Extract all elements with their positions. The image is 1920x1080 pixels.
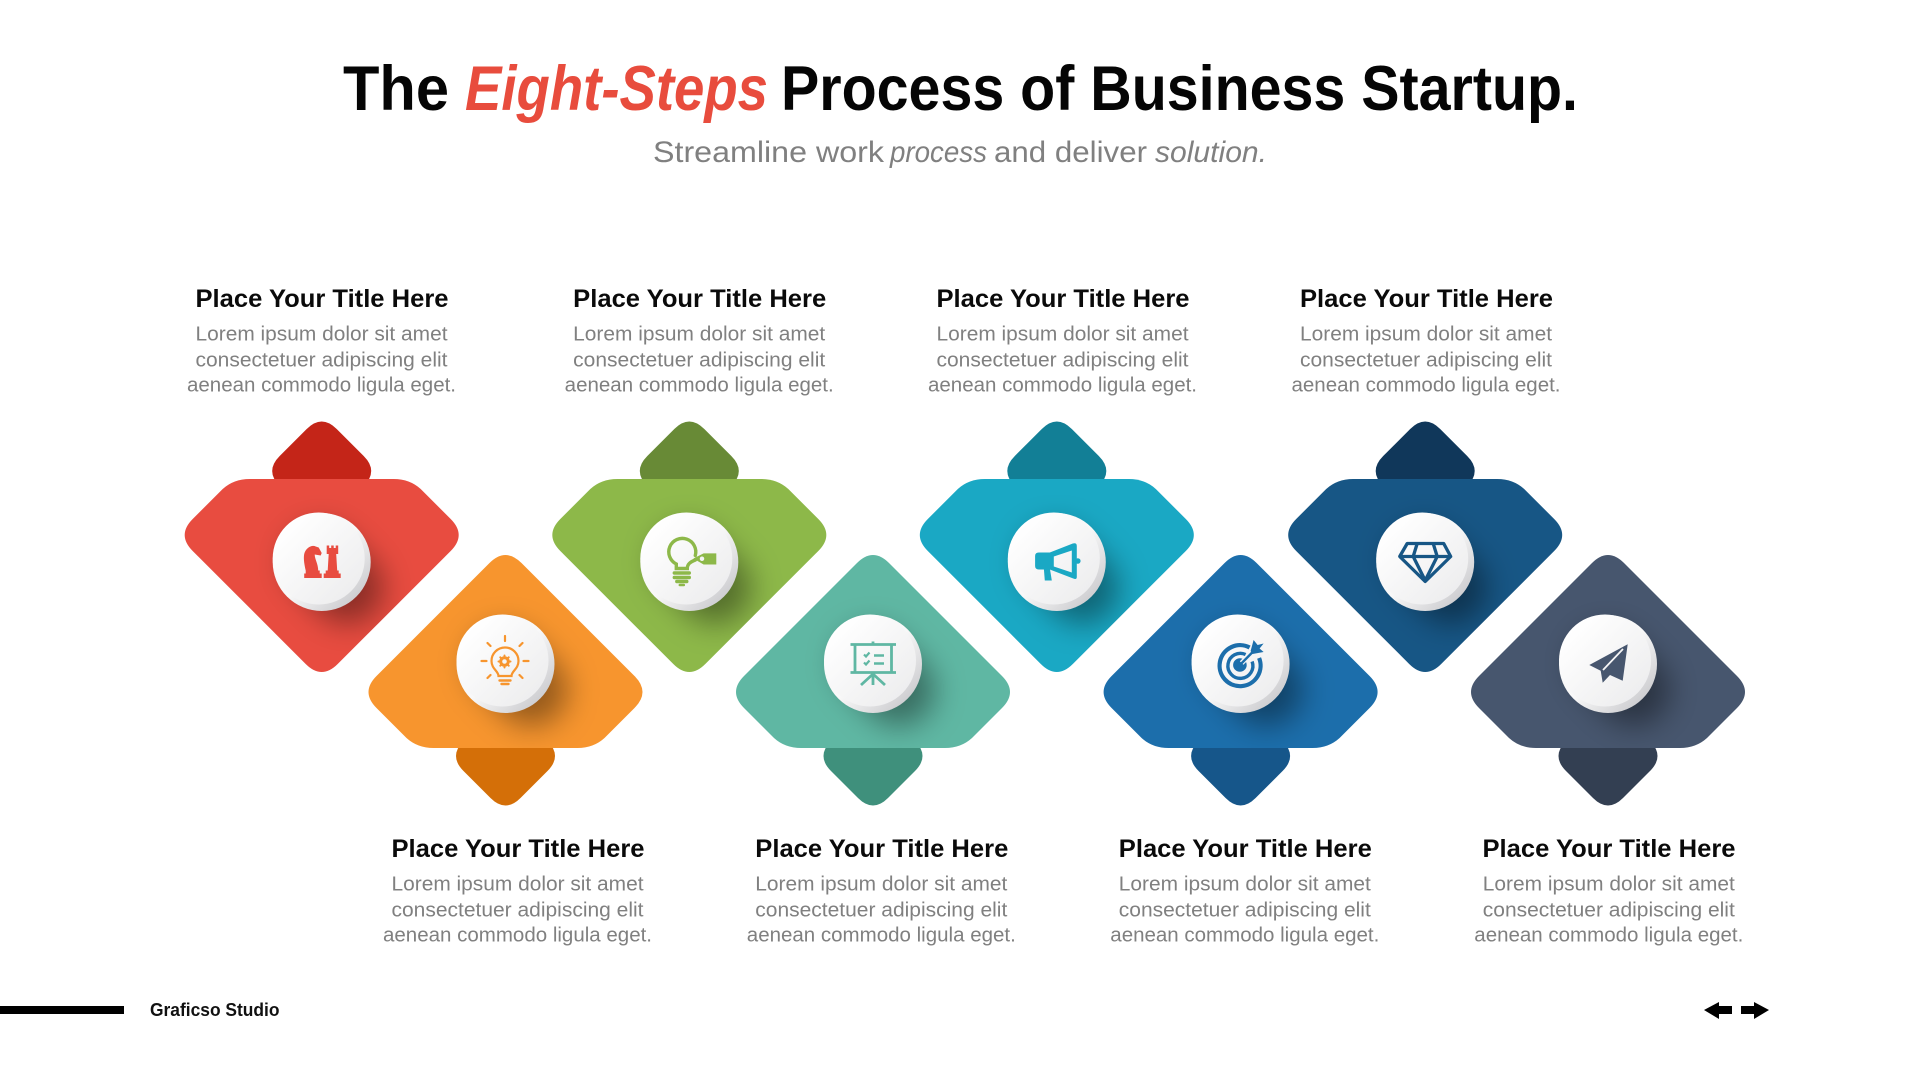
badge with gem icon xyxy=(1376,512,1474,611)
text block: step 6: consectetuer adipiscing elit xyxy=(1119,900,1371,922)
subtitle xyxy=(653,136,1267,169)
step 1: red diamond xyxy=(185,422,459,672)
title: The xyxy=(343,54,449,124)
badge with bulb icon xyxy=(456,614,554,713)
text block: step 6: Place Your Title Here xyxy=(1119,835,1372,863)
icon: paper plane xyxy=(1589,644,1628,683)
icon: megaphone xyxy=(1035,543,1081,580)
text block: step 7: Lorem ipsum dolor sit amet xyxy=(1300,324,1552,346)
text block: step 3: consectetuer adipiscing elit xyxy=(573,350,826,372)
badge with bulb tag icon xyxy=(640,512,738,611)
tab xyxy=(1376,422,1475,528)
text block: step 3: Place Your Title Here xyxy=(573,285,826,313)
text block: step 4: Lorem ipsum dolor sit amet xyxy=(755,874,1008,896)
diamond body xyxy=(185,479,459,672)
tab xyxy=(640,422,739,528)
title xyxy=(343,54,1578,124)
diamond body xyxy=(1471,555,1745,748)
badge with paper plane icon xyxy=(1559,614,1657,713)
icon: presentation board xyxy=(850,642,896,685)
step 4: teal diamond xyxy=(736,555,1010,806)
step 7: navy diamond xyxy=(1288,422,1562,672)
footer label: Graficso Studio xyxy=(150,999,280,1020)
step 8: slate diamond xyxy=(1471,555,1745,806)
title: Eight-Steps xyxy=(465,54,768,124)
text block: step 4: Place Your Title Here xyxy=(755,835,1008,863)
tab xyxy=(272,422,371,528)
text block: step 2 xyxy=(383,835,652,946)
text block: step 6: Lorem ipsum dolor sit amet xyxy=(1119,874,1371,896)
text block: step 8: Lorem ipsum dolor sit amet xyxy=(1483,874,1735,896)
text block: step 5: consectetuer adipiscing elit xyxy=(936,350,1189,372)
text block: step 1: consectetuer adipiscing elit xyxy=(196,350,448,372)
tab xyxy=(1007,422,1106,528)
text block: step 4 xyxy=(747,835,1016,946)
diamond body xyxy=(736,555,1010,748)
badge with megaphone icon xyxy=(1008,512,1106,611)
tab xyxy=(1191,699,1290,806)
text block: step 2: aenean commodo ligula eget. xyxy=(383,924,652,946)
step 6: blue diamond xyxy=(1104,555,1378,806)
diamond body xyxy=(920,479,1194,672)
diamond body xyxy=(1104,555,1378,748)
navigation arrows xyxy=(1704,1002,1769,1019)
icon: diamond gem xyxy=(1400,544,1451,582)
subtitle: solution. xyxy=(1155,136,1267,169)
text block: step 8: Place Your Title Here xyxy=(1482,835,1736,863)
badge with presentation icon xyxy=(824,614,922,713)
text block: step 5: Lorem ipsum dolor sit amet xyxy=(936,324,1189,346)
text block: step 2: Place Your Title Here xyxy=(392,835,645,863)
icon: right arrow xyxy=(1741,1002,1769,1019)
text block: step 6: aenean commodo ligula eget. xyxy=(1110,924,1379,946)
footer bar xyxy=(0,1006,124,1014)
step 3: green diamond xyxy=(552,422,826,672)
step 2: orange diamond xyxy=(368,555,642,806)
icon: light bulb with gear xyxy=(482,636,528,684)
tab xyxy=(456,699,555,806)
step 5: cyan diamond xyxy=(920,422,1194,672)
text block: step 7: Place Your Title Here xyxy=(1300,285,1553,313)
title: Process of Business Startup. xyxy=(781,54,1578,124)
subtitle: Streamline work xyxy=(653,136,885,169)
text block: step 7: consectetuer adipiscing elit xyxy=(1300,350,1552,372)
text block: step 3: Lorem ipsum dolor sit amet xyxy=(573,324,826,346)
text block: step 1: aenean commodo ligula eget. xyxy=(187,374,456,396)
icon: bulb with price tag xyxy=(669,538,716,585)
text block: step 1: Lorem ipsum dolor sit amet xyxy=(196,324,448,346)
text block: step 5: aenean commodo ligula eget. xyxy=(928,374,1197,396)
text block: step 3 xyxy=(565,285,834,396)
text block: step 1 xyxy=(187,285,456,396)
text block: step 6 xyxy=(1110,835,1379,946)
text block: step 7 xyxy=(1292,285,1560,396)
icon: target with arrow xyxy=(1220,640,1264,686)
text block: step 5: Place Your Title Here xyxy=(936,285,1190,313)
icon: left arrow xyxy=(1704,1002,1732,1019)
tab xyxy=(824,699,922,806)
subtitle: process xyxy=(889,136,987,169)
text block: step 3: aenean commodo ligula eget. xyxy=(565,374,834,396)
diamond body xyxy=(552,479,826,672)
badge with chess icon xyxy=(273,512,371,611)
diamond body xyxy=(1288,479,1562,672)
icon: chess pieces xyxy=(304,546,341,578)
text block: step 2: consectetuer adipiscing elit xyxy=(392,900,644,922)
text block: step 4: consectetuer adipiscing elit xyxy=(755,900,1008,922)
tab xyxy=(1558,699,1658,806)
text block: step 2: Lorem ipsum dolor sit amet xyxy=(392,874,644,896)
text block: step 8: aenean commodo ligula eget. xyxy=(1474,924,1743,946)
text block: step 4: aenean commodo ligula eget. xyxy=(747,924,1016,946)
badge with target icon xyxy=(1192,614,1290,713)
text block: step 8 xyxy=(1474,835,1743,946)
text block: step 1: Place Your Title Here xyxy=(196,285,449,313)
diamond body xyxy=(368,555,642,748)
text block: step 5 xyxy=(928,285,1197,396)
subtitle: and deliver xyxy=(994,136,1147,169)
text block: step 7: aenean commodo ligula eget. xyxy=(1292,374,1560,396)
text block: step 8: consectetuer adipiscing elit xyxy=(1483,900,1735,922)
